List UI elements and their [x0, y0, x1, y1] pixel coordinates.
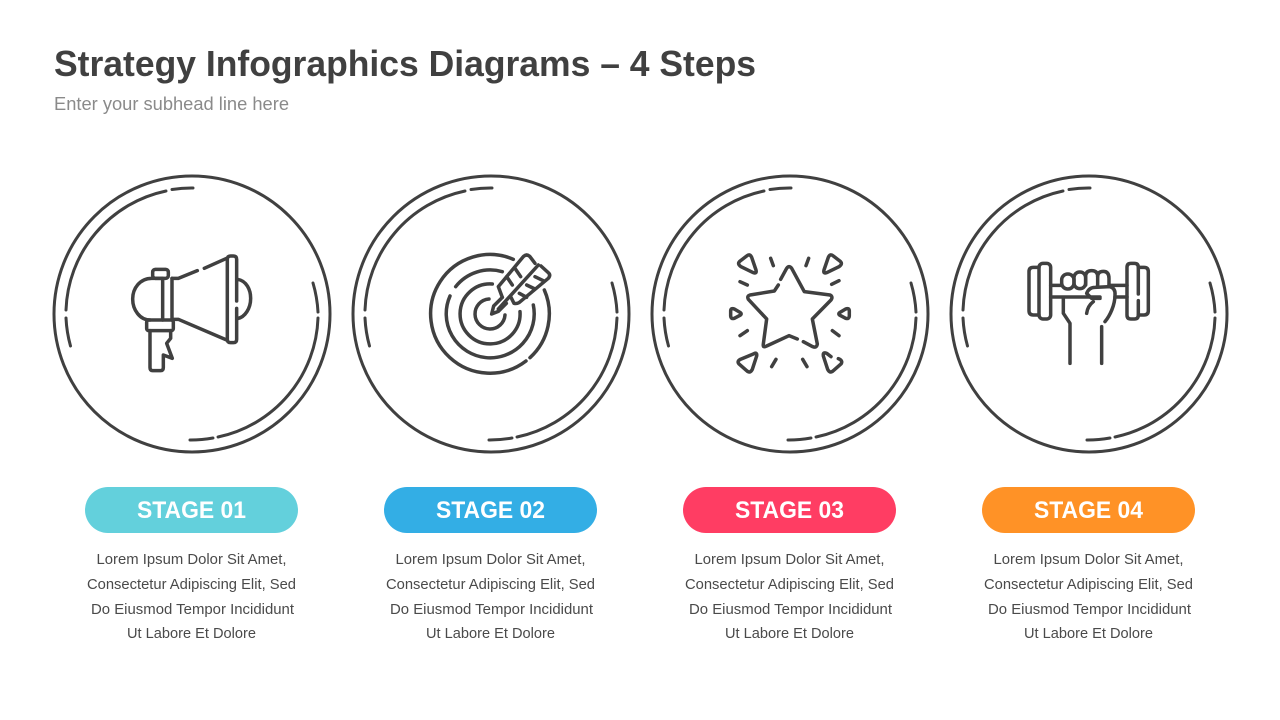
description 4: Lorem Ipsum Dolor Sit Amet,	[994, 552, 1184, 568]
title: Strategy Infographics Diagrams – 4 Steps	[54, 43, 756, 84]
stage pill 1: STAGE 01	[137, 497, 246, 524]
description 3: Lorem Ipsum Dolor Sit Amet,	[694, 552, 884, 568]
description 4: Ut Labore Et Dolore	[1024, 626, 1153, 642]
panel: stage 01	[54, 176, 330, 642]
description 3	[685, 552, 894, 642]
icon: megaphone	[133, 256, 251, 371]
description 1	[87, 552, 296, 642]
stage pill 2: STAGE 02	[436, 497, 545, 524]
description 1: Do Eiusmod Tempor Incididunt	[91, 602, 294, 618]
stage pill 3: STAGE 03	[735, 497, 844, 524]
icon: star with sparkles	[731, 255, 849, 372]
icon: fist lifting dumbbell	[1029, 263, 1148, 363]
stage pill 4: STAGE 04	[1034, 497, 1144, 524]
stage pill 3	[683, 487, 896, 533]
description 4	[984, 552, 1193, 642]
stage pill 4	[982, 487, 1195, 533]
circle frame 1	[54, 176, 330, 452]
panel: stage 04	[951, 176, 1227, 642]
description 4: Do Eiusmod Tempor Incididunt	[988, 602, 1191, 618]
circle frame 3	[652, 176, 928, 452]
description 2: Consectetur Adipiscing Elit, Sed	[386, 577, 595, 593]
description 4: Consectetur Adipiscing Elit, Sed	[984, 577, 1193, 593]
description 3: Ut Labore Et Dolore	[725, 626, 854, 642]
panel: stage 02	[353, 176, 629, 642]
description 2: Ut Labore Et Dolore	[426, 626, 555, 642]
panel: stage 03	[652, 176, 928, 642]
stage pill 2	[384, 487, 597, 533]
description 2: Lorem Ipsum Dolor Sit Amet,	[396, 552, 586, 568]
description 3: Do Eiusmod Tempor Incididunt	[689, 602, 892, 618]
description 2: Do Eiusmod Tempor Incididunt	[390, 602, 593, 618]
description 3: Consectetur Adipiscing Elit, Sed	[685, 577, 894, 593]
circle frame 4	[951, 176, 1227, 452]
icon: target with arrow	[431, 255, 550, 373]
description 1: Lorem Ipsum Dolor Sit Amet,	[96, 552, 286, 568]
circle frame 2	[353, 176, 629, 452]
subhead: Enter your subhead line here	[54, 94, 289, 114]
description 2	[386, 552, 595, 642]
description 1: Consectetur Adipiscing Elit, Sed	[87, 577, 296, 593]
stage pill 1	[85, 487, 298, 533]
description 1: Ut Labore Et Dolore	[127, 626, 256, 642]
